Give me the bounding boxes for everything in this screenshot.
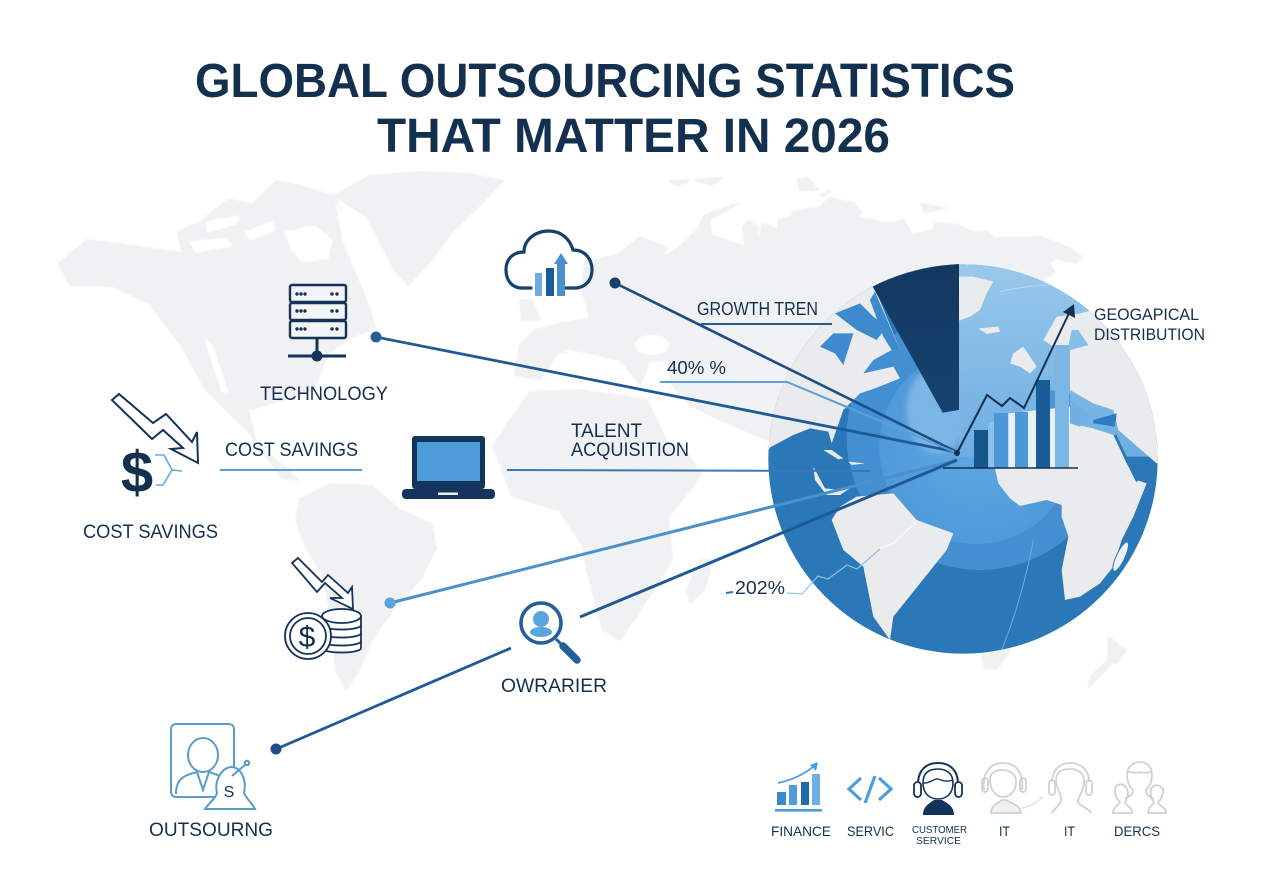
icon: laptop: [402, 436, 495, 499]
sector labels: IT: [1064, 823, 1075, 839]
label: 40 percent: 40% %: [667, 358, 726, 378]
icon: outsourcing portrait: [171, 724, 255, 809]
connector: outsourcing to search: [270, 648, 511, 754]
title: GLOBAL OUTSOURCING STATISTICS: [195, 55, 1015, 108]
dark wedge: [873, 264, 959, 413]
connector: growth trend label: [701, 323, 832, 325]
label: owrarier: OWRARIER: [501, 676, 607, 697]
africa land: [995, 423, 1147, 600]
icon: server rack: [288, 285, 346, 362]
icon: magnifier with person: [521, 603, 577, 660]
sector labels: SERVIC: [847, 823, 894, 839]
connector: talent acquisition: [507, 470, 870, 471]
label: outsourcing: OUTSOURNG: [149, 819, 273, 841]
icon: cost savings arrow and dollar: [112, 394, 198, 505]
south america land: [832, 493, 953, 640]
label: cost savings on line: COST SAVINGS: [225, 440, 358, 461]
seas and straits: [988, 390, 1156, 573]
icon: headset outline: [1049, 763, 1092, 813]
label: growth trend: GROWTH TREN: [697, 299, 818, 319]
label: cost savings: COST SAVINGS: [83, 522, 218, 543]
panel: sector icons: [771, 762, 1166, 847]
icon: people group: [1113, 762, 1166, 813]
connector: 40% to globe: [660, 382, 957, 453]
label: geographical distribution: GEOGAPICAL: [1094, 306, 1199, 324]
connector: search to globe: [580, 460, 957, 617]
thin globe lines: [880, 284, 1050, 650]
north america land: [768, 286, 900, 495]
icon: support agent: [982, 763, 1043, 813]
label: talent acquisition: ACQUISITION: [571, 440, 689, 461]
sector labels: CUSTOMER: [912, 825, 967, 836]
connector: cost savings: [220, 469, 362, 471]
label: 202 percent: [726, 549, 880, 598]
greenland and europe land: [959, 277, 1177, 463]
title: THAT MATTER IN 2026: [377, 110, 890, 163]
icon: cost savings arrow and dollar: $: [121, 440, 153, 505]
icon: customer service headset: [914, 763, 962, 815]
label: technology: TECHNOLOGY: [260, 384, 388, 405]
label: talent acquisition: [571, 421, 689, 461]
label: geographical distribution: [1094, 306, 1205, 344]
label: talent acquisition: TALENT: [571, 421, 642, 442]
sector labels: SERVICE: [916, 836, 961, 847]
icon: code: [849, 776, 891, 803]
icon: finance: [775, 762, 822, 812]
globe: [768, 264, 1158, 654]
sector labels: FINANCE: [771, 823, 831, 839]
chart: bars and trend: [943, 304, 1078, 468]
label: 202 percent: 202%: [735, 578, 785, 598]
sector labels: DERCS: [1114, 823, 1160, 839]
connector: technology to globe: [370, 332, 957, 452]
icon: outsourcing portrait: S: [224, 784, 234, 801]
connector: cloud to globe: [610, 278, 957, 452]
icon: coins with arrow: [285, 558, 361, 659]
background world map: [59, 172, 1126, 690]
label: geographical distribution: DISTRIBUTION: [1094, 326, 1205, 344]
connector: coins to globe: [384, 460, 957, 608]
title: [195, 55, 1015, 163]
sector labels: IT: [999, 823, 1010, 839]
icon: cloud: [506, 231, 592, 296]
sector labels: [771, 823, 1160, 847]
ocean lighter zones: [847, 250, 1173, 570]
icon: coins with arrow: $: [299, 621, 316, 654]
